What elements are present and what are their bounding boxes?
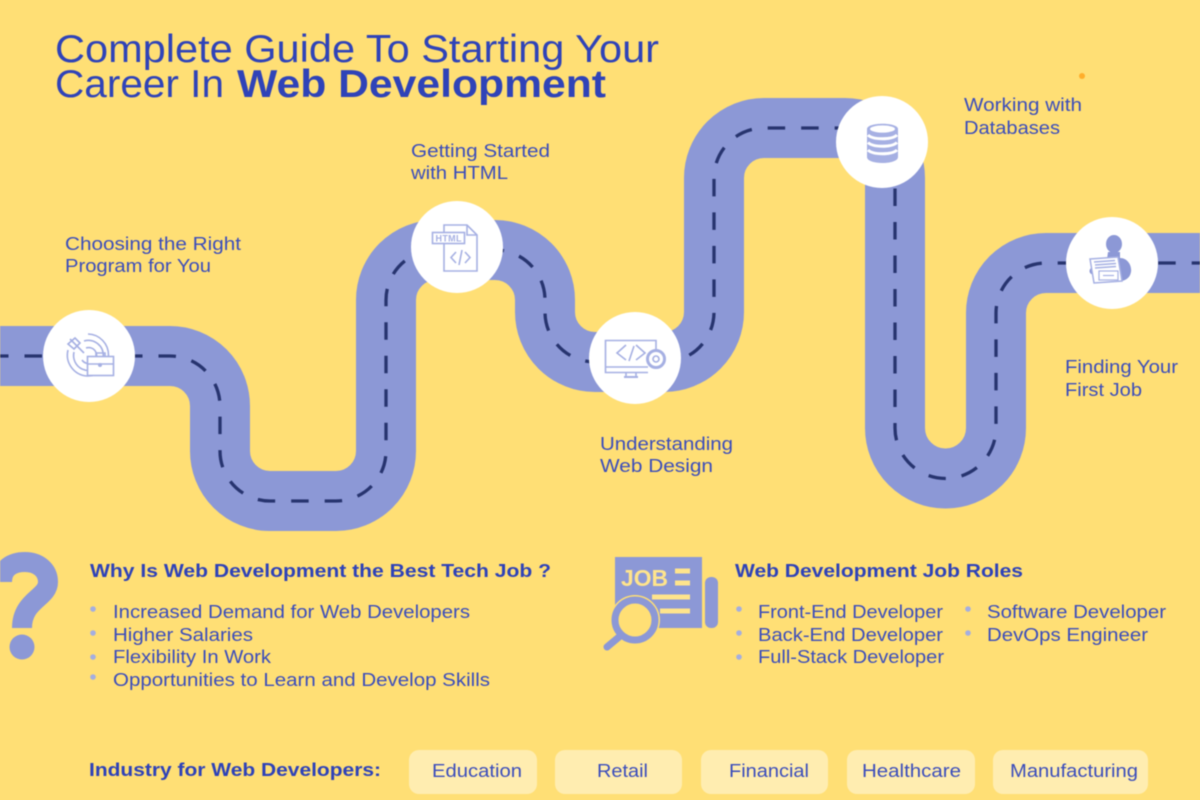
label: getting started with HTML: with HTML [410, 162, 508, 183]
pill: manufacturing: Manufacturing [1010, 760, 1138, 781]
list: job roles column one: Back-End Developer [758, 624, 943, 645]
label: getting started with HTML [410, 140, 550, 183]
label: working with databases: Working with [964, 94, 1082, 115]
milestone 2: HTML document icon: HTML [436, 234, 462, 244]
heading: job roles: Web Development Job Roles [735, 560, 1023, 581]
pill: manufacturing [993, 750, 1148, 794]
icon: job newspaper and magnifier: JOB [621, 565, 668, 591]
label: working with databases [964, 94, 1082, 138]
title: Web Development [237, 63, 606, 106]
heading: industry for web developers: Industry for Web Developers: [89, 759, 381, 780]
label: choosing the right program: Program for You [65, 255, 211, 276]
icon: job newspaper and magnifier [607, 557, 718, 647]
pill: retail [555, 750, 682, 794]
winding road [0, 128, 1200, 501]
label: understanding web design [600, 433, 733, 476]
label: getting started with HTML: Getting Started [411, 140, 550, 161]
label: choosing the right program [65, 233, 241, 276]
list: reasons for web development: Higher Salaries [113, 624, 253, 645]
pill: financial: Financial [729, 760, 809, 781]
label: working with databases: Databases [964, 117, 1060, 138]
label: understanding web design: Understanding [600, 433, 733, 454]
list: reasons for web development: Opportunities to Learn and Develop Skills [113, 669, 490, 690]
icon: question mark [2, 562, 48, 660]
label: finding your first job: First Job [1065, 379, 1142, 400]
milestone 4: database icon [836, 96, 928, 188]
list: job roles column two [965, 601, 1166, 645]
list: job roles column one: Full-Stack Developer [758, 646, 944, 667]
label: finding your first job: Finding Your [1065, 356, 1178, 377]
list: job roles column one: Front-End Developer [758, 601, 943, 622]
pill: healthcare: Healthcare [862, 760, 961, 781]
list: job roles column one [736, 601, 944, 667]
title: Career In [55, 63, 224, 106]
pill: healthcare [847, 750, 975, 794]
milestone 2: HTML document icon [411, 201, 503, 293]
pill: education [409, 750, 537, 794]
title [55, 28, 659, 106]
pill: retail: Retail [597, 760, 648, 781]
milestone 1: target and briefcase icon [43, 310, 135, 402]
title: Complete Guide To Starting Your [55, 28, 659, 71]
label: choosing the right program: Choosing the Right [65, 233, 241, 254]
label: finding your first job [1065, 356, 1178, 400]
pill: education: Education [432, 760, 522, 781]
pill: financial [701, 750, 828, 794]
list: job roles column two: Software Developer [987, 601, 1166, 622]
list: reasons for web development: Increased Demand for Web Developers [113, 601, 470, 622]
orange accent dot [1079, 73, 1085, 79]
heading: why web development: Why Is Web Development the Best Tech Job ? [90, 560, 551, 581]
list: job roles column two: DevOps Engineer [987, 624, 1148, 645]
milestone 3: monitor and gear icon [589, 312, 681, 404]
list: reasons for web development: Flexibility In Work [113, 646, 272, 667]
milestone 5: person with resume icon [1066, 217, 1158, 309]
label: understanding web design: Web Design [600, 455, 713, 476]
list: reasons for web development [90, 601, 490, 690]
